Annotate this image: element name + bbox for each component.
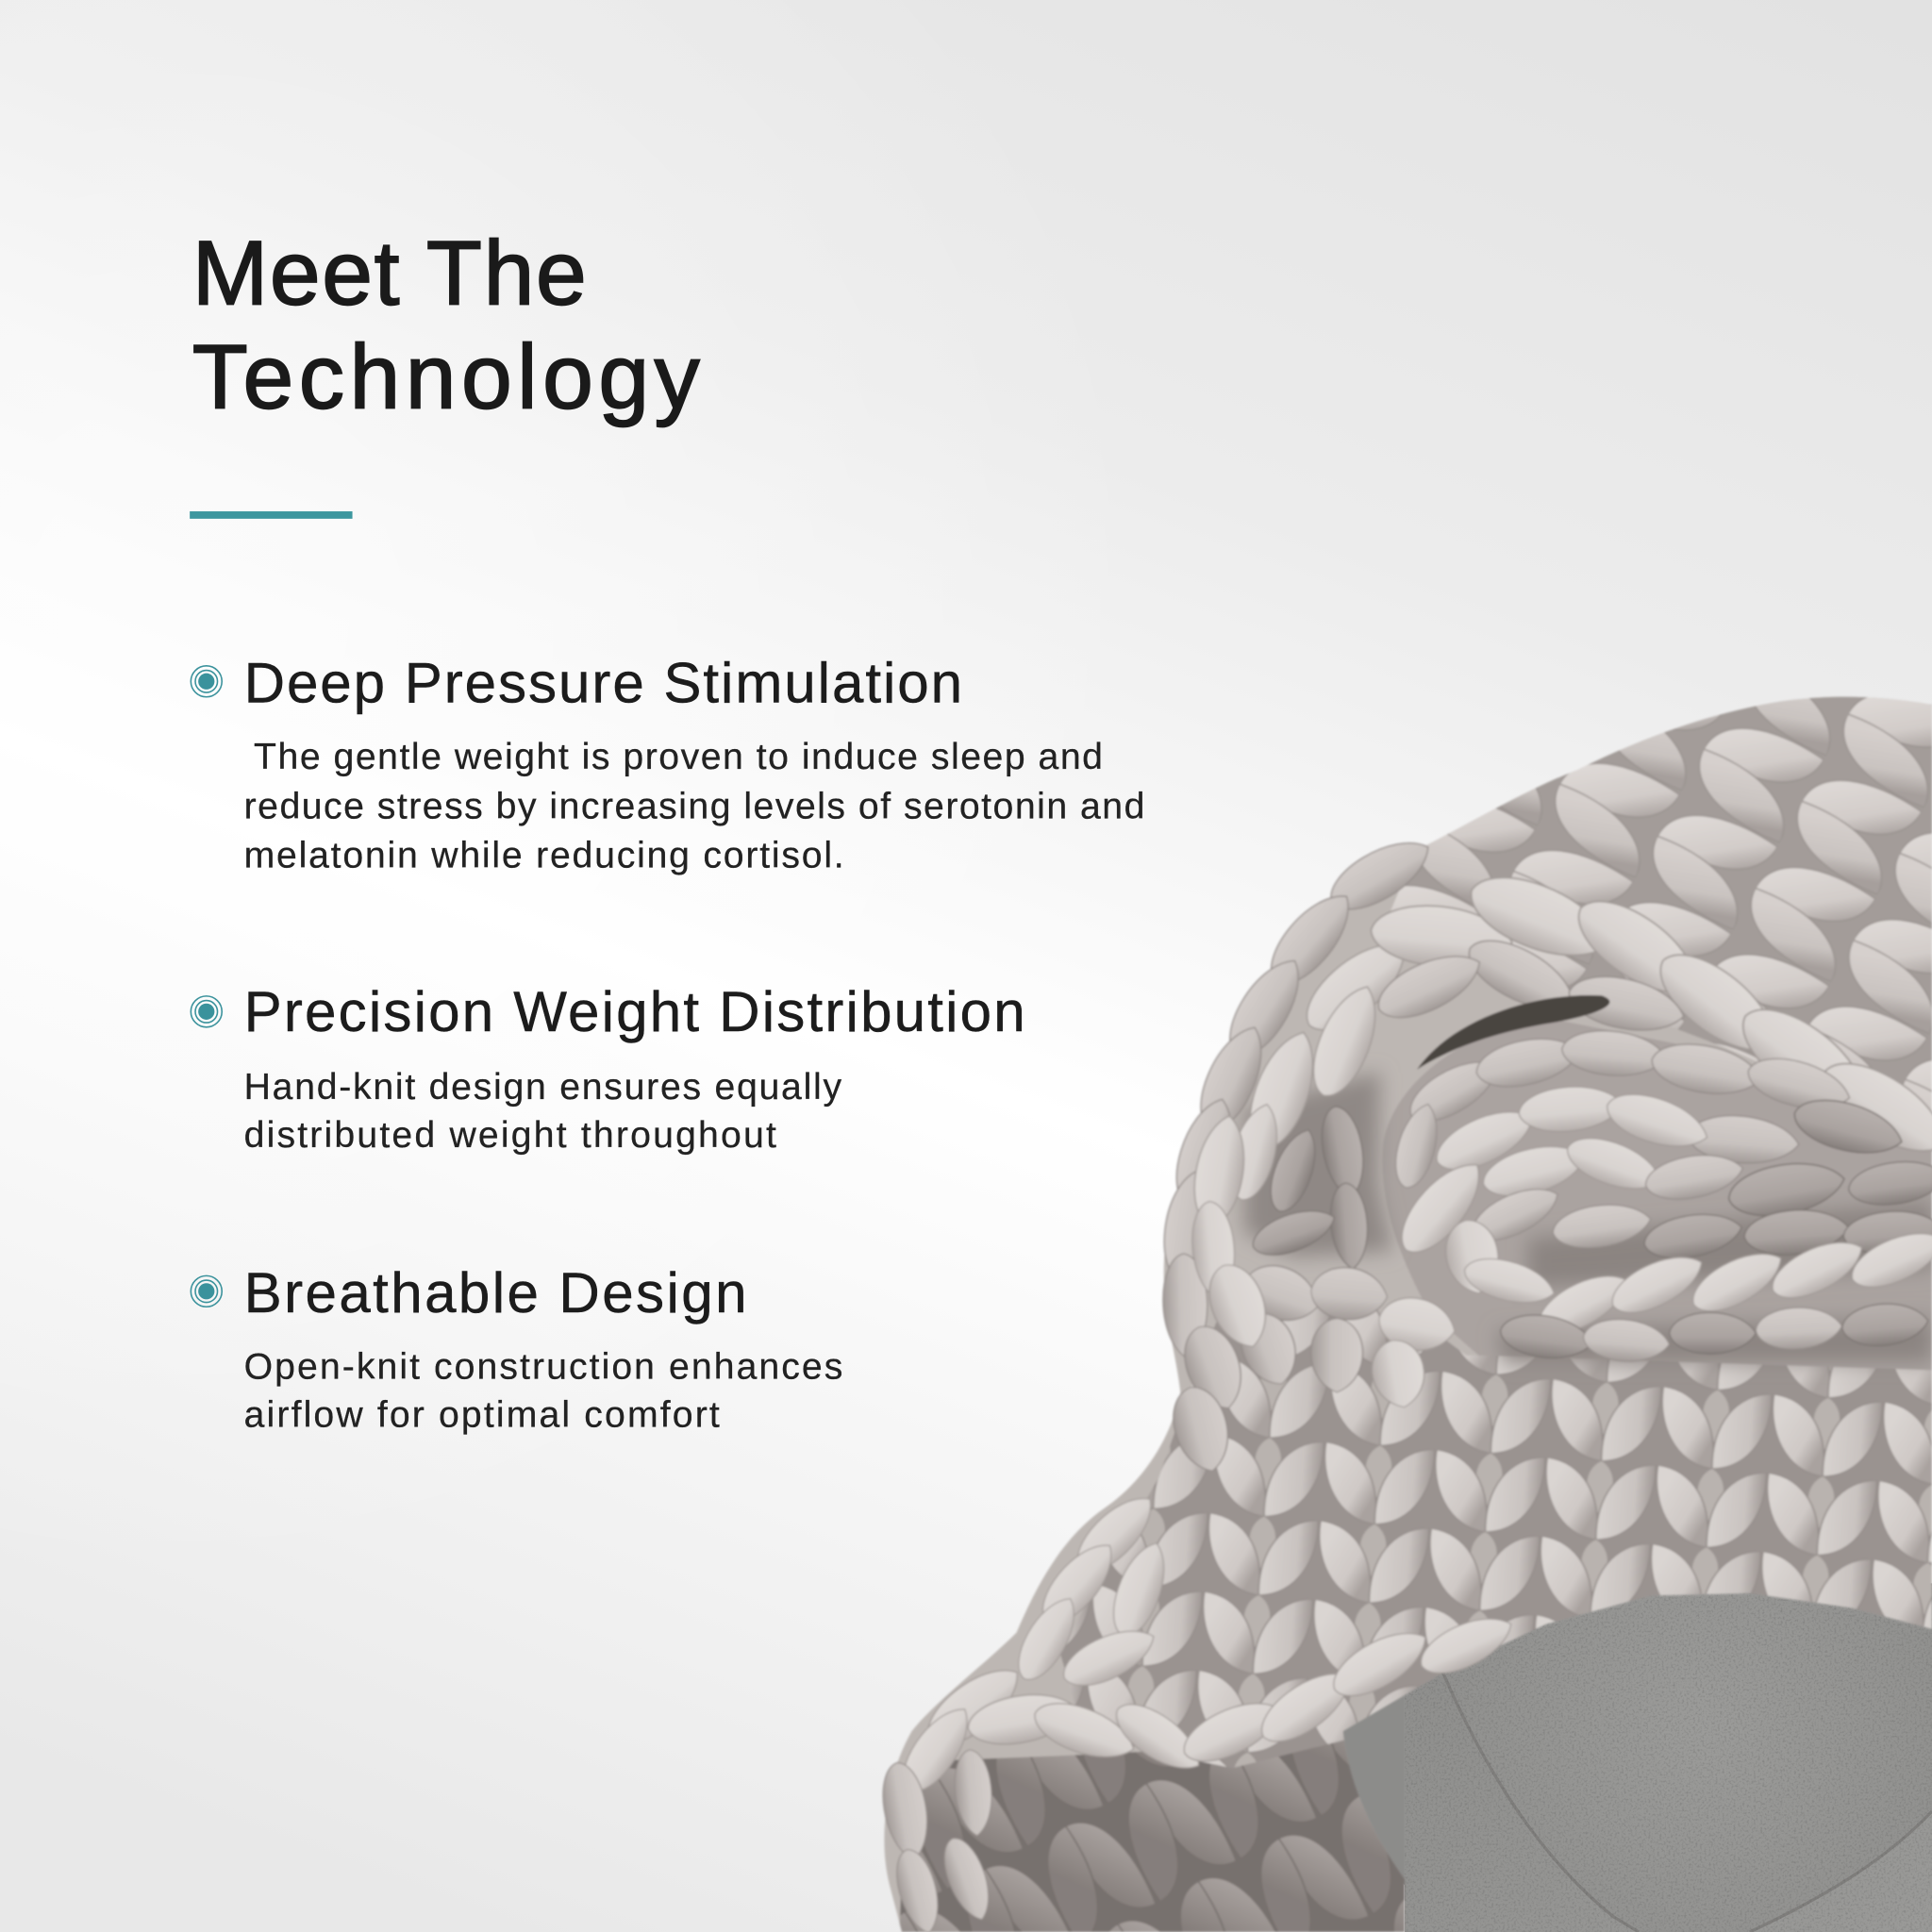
folded blanket braids: [1388, 1027, 1932, 1298]
icon: teal target bullet: [191, 1275, 222, 1307]
icon: teal target bullet: [191, 666, 222, 697]
text: breathable description: Open-knit construction enhances: [244, 1347, 842, 1388]
inner pocket shading: [1244, 1072, 1392, 1257]
heading: precision weight distribution: Precision Weight Distribution: [244, 980, 1025, 1043]
text: deep pressure description: reduce stress by increasing levels of serotonin and: [244, 786, 1144, 826]
upper rope over fold: [1369, 861, 1932, 1172]
text: deep pressure description: The gentle weight is proven to induce sleep and: [254, 737, 1103, 777]
heading: deep pressure stimulation: Deep Pressure Stimulation: [244, 651, 962, 714]
text: precision weight description: [244, 1067, 841, 1156]
left drape bump stitches: [876, 1485, 1520, 1932]
text: breathable description: airflow for optimal comfort: [244, 1394, 720, 1435]
fold base: [1382, 1017, 1932, 1370]
title: [192, 224, 701, 427]
text: precision weight description: Hand-knit design ensures equally: [244, 1067, 841, 1108]
accent divider: [190, 511, 353, 519]
pale bulky stitches under fold: [1232, 1257, 1459, 1411]
top herringbone knit: [1380, 694, 1932, 1140]
heading: breathable design: Breathable Design: [244, 1261, 747, 1324]
lower dark drape: [899, 1731, 1405, 1932]
title: Meet The: [192, 224, 587, 325]
fold shadow bands: [1497, 1201, 1932, 1361]
feature: breathable design: [191, 1261, 842, 1435]
feature: deep pressure stimulation: [191, 651, 1144, 876]
twisted rope: [1459, 1221, 1932, 1365]
icon: teal target bullet: [191, 996, 222, 1027]
pocket stitches: [1247, 1103, 1371, 1271]
text: precision weight description: distributed weight throughout: [244, 1115, 776, 1156]
dark fold gap: [1417, 995, 1609, 1070]
text: deep pressure description: melatonin while reducing cortisol.: [244, 836, 844, 876]
blanket base tone: [883, 891, 1757, 1923]
text: breathable description: [244, 1347, 842, 1435]
text: deep pressure description: [244, 737, 1144, 876]
concrete bust: [1337, 1583, 1932, 1932]
left rim braid: [1158, 827, 1440, 1477]
illustration: knit blanket on concrete bust: [862, 677, 1932, 1932]
front ribbed knit panel: [1059, 1281, 1932, 1768]
title: Technology: [192, 326, 701, 427]
feature: precision weight distribution: [191, 980, 1025, 1156]
blanket: [862, 677, 1932, 1932]
